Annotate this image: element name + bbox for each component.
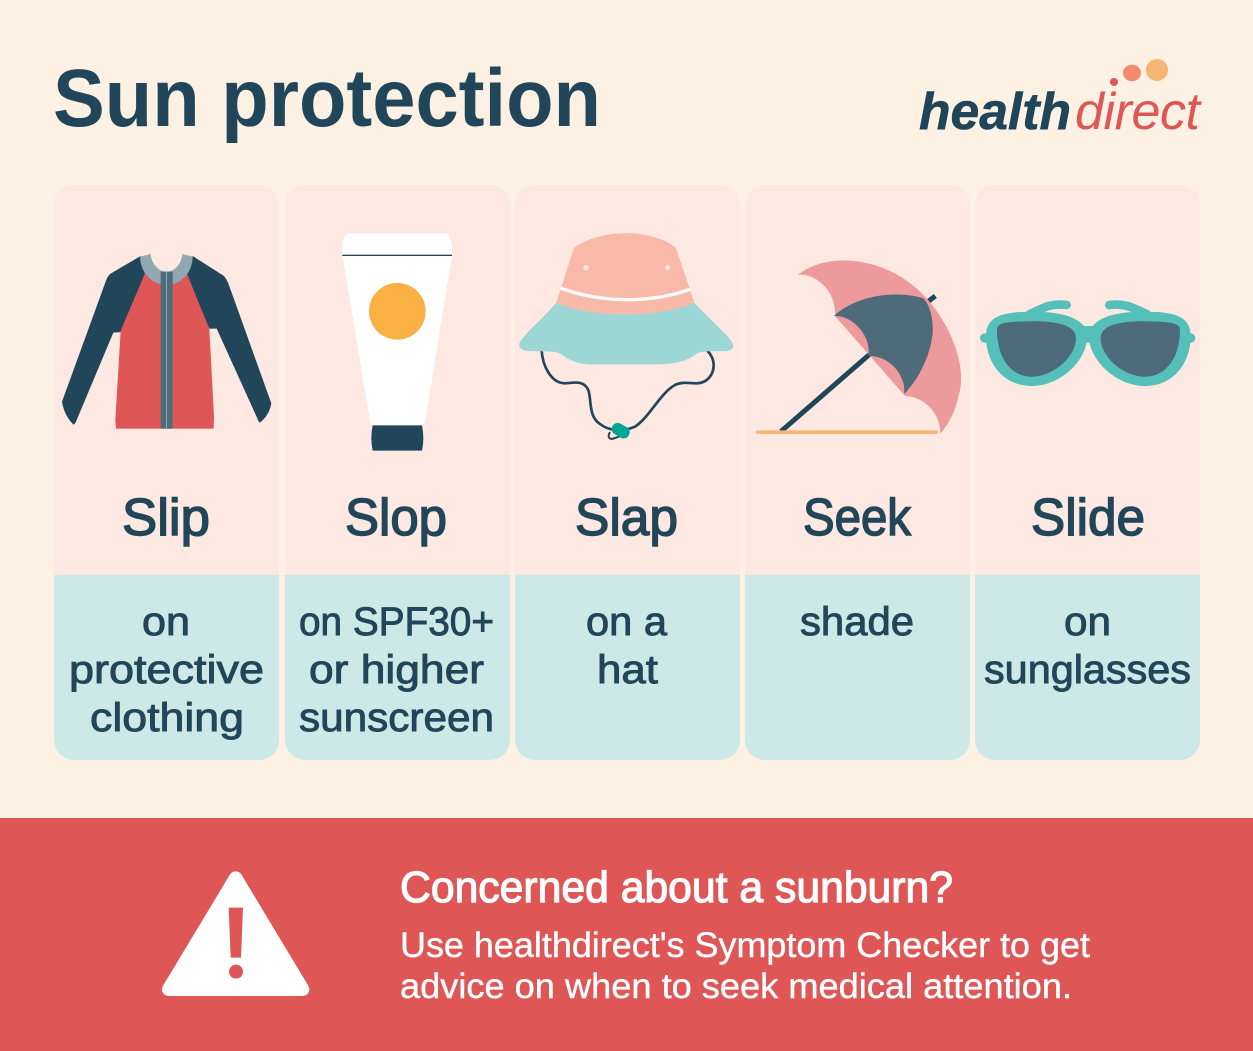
text: on sunglasses <box>984 600 1191 692</box>
text: on SPF30+ or higher sunscreen: on SPF30+ <box>299 600 494 644</box>
text: on protective clothing <box>69 600 264 740</box>
icon: sunscreen tube <box>342 233 452 451</box>
icon: bucket hat <box>519 233 733 441</box>
text: on SPF30+ or higher sunscreen <box>299 600 494 740</box>
panel: slop <box>285 185 510 760</box>
text: on sunglasses: on <box>1064 600 1111 644</box>
text: on SPF30+ or higher sunscreen: or higher <box>309 648 484 692</box>
title: Sun protection <box>53 53 601 144</box>
text: on a hat: hat <box>597 648 658 692</box>
text: on protective clothing: on <box>142 600 190 644</box>
panel: slap <box>515 185 740 760</box>
logo: healthdirect: direct <box>1075 83 1203 141</box>
heading: slip: Slip <box>122 489 210 547</box>
icon: warning triangle <box>169 878 303 989</box>
logo: healthdirect: health <box>919 83 1071 141</box>
heading: slop: Slop <box>345 489 447 547</box>
text: on protective clothing: protective <box>69 648 264 692</box>
banner heading: Concerned about a sunburn? <box>400 863 953 912</box>
banner text: advice on when to seek medical attention. <box>400 967 1072 1006</box>
icon: beach umbrella <box>756 260 961 434</box>
panel: seek <box>745 185 970 760</box>
icon: jacket <box>62 254 271 429</box>
text: on protective clothing: clothing <box>90 696 244 740</box>
banner text <box>400 926 1090 1006</box>
heading: slap: Slap <box>575 489 678 547</box>
heading: slide: Slide <box>1031 489 1145 547</box>
logo: healthdirect <box>919 59 1203 141</box>
text: shade: shade <box>800 600 914 644</box>
text: on SPF30+ or higher sunscreen: sunscreen <box>299 696 494 740</box>
banner text: Use healthdirect's Symptom Checker to get <box>400 926 1090 965</box>
text: on a hat: on a <box>586 600 668 644</box>
icon: sunglasses <box>980 305 1195 386</box>
panel: sunburn banner <box>0 818 1253 1051</box>
text: on a hat <box>586 600 668 692</box>
panel: slide <box>975 185 1200 760</box>
text: on sunglasses: sunglasses <box>984 648 1191 692</box>
panel: slip <box>54 185 279 760</box>
heading: seek: Seek <box>803 489 912 547</box>
